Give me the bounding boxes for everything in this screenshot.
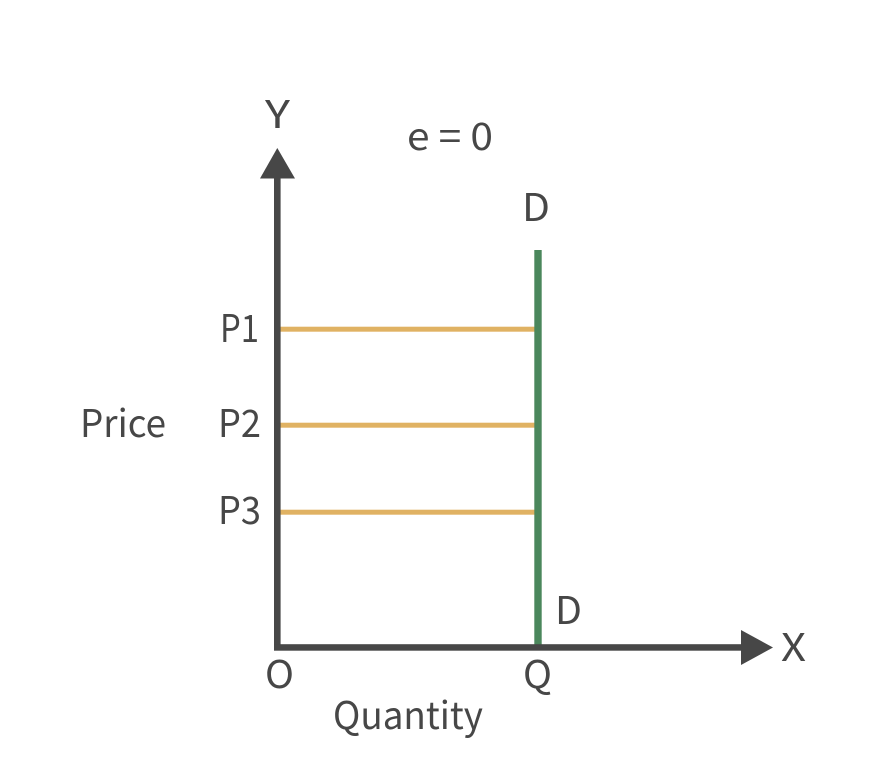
label: e = 0: e = 0 bbox=[407, 106, 493, 161]
demand line D-D bbox=[534, 250, 542, 645]
Y axis with arrow bbox=[260, 148, 295, 650]
label: D top: D bbox=[522, 177, 550, 232]
label: P2: P2 bbox=[218, 393, 261, 448]
label: Quantity: Quantity bbox=[333, 685, 483, 740]
label: P1: P1 bbox=[220, 298, 259, 353]
label: Q: Q bbox=[523, 644, 552, 699]
label: X: X bbox=[781, 617, 806, 672]
label: D bottom: D bbox=[555, 580, 582, 635]
label: P3: P3 bbox=[218, 480, 261, 535]
label: Y: Y bbox=[264, 84, 291, 139]
price guide lines bbox=[280, 327, 535, 515]
label: Price: Price bbox=[80, 393, 166, 448]
X axis with arrow bbox=[274, 630, 773, 665]
label: O: O bbox=[265, 644, 294, 699]
